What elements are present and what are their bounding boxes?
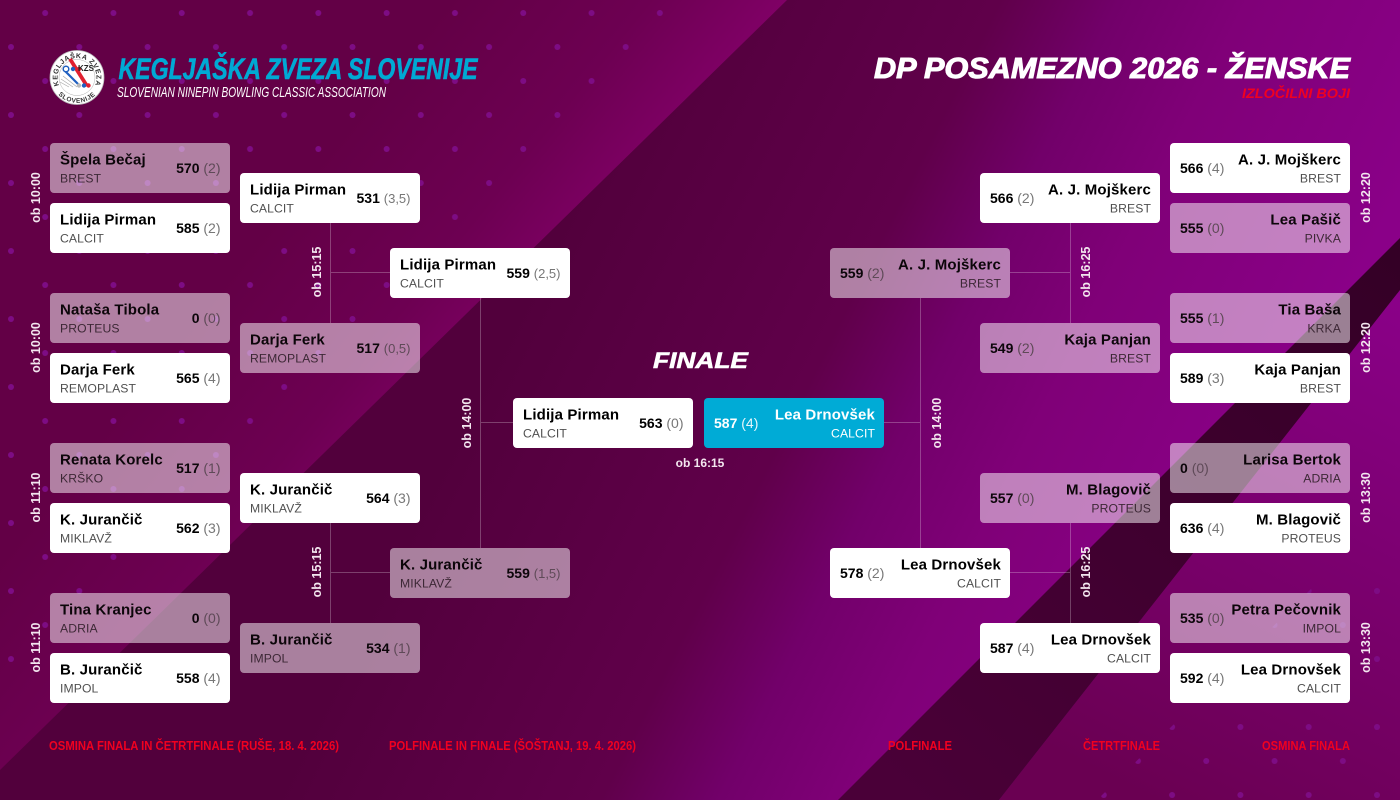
match card: B. Jurančič: B. Jurančič — [250, 632, 333, 648]
match card: Nataša Tibola: 0 (0) — [192, 310, 220, 326]
match card: Lea Drnovšek (winner): CALCIT — [831, 426, 875, 440]
match card: K. Jurančič: MIKLAVŽ — [60, 530, 112, 546]
match card: Lea Drnovšek: Lea Drnovšek — [1051, 632, 1151, 648]
match card: K. Jurančič: MIKLAVŽ — [400, 576, 452, 590]
match card: Petra Pečovnik: IMPOL — [1303, 622, 1341, 636]
match card: Tia Baša: Tia Baša — [1278, 302, 1341, 318]
round labels footer: POLFINALE IN FINALE (ŠOŠTANJ, 19. 4. 2026) — [389, 738, 636, 753]
title: DP POSAMEZNO 2026 - ŽENSKE — [874, 51, 1352, 85]
match card: B. Jurančič: IMPOL — [60, 682, 99, 696]
match card: Lea Drnovšek: 592 (4) — [1180, 670, 1224, 686]
match card: Lea Drnovšek: CALCIT — [1107, 652, 1151, 666]
match card: B. Jurančič: B. Jurančič — [60, 662, 143, 678]
match card: Kaja Panjan — [980, 323, 1160, 373]
match card: Nataša Tibola: Nataša Tibola — [60, 302, 160, 318]
match card: Darja Ferk — [50, 353, 230, 403]
match card: Darja Ferk — [240, 323, 420, 373]
match card: Tina Kranjec: Tina Kranjec — [60, 602, 152, 618]
match card: Lea Drnovšek: CALCIT — [957, 576, 1001, 590]
match card: Lea Pašič: Lea Pašič — [1270, 212, 1341, 228]
match card: K. Jurančič: 559 (1,5) — [507, 565, 560, 581]
match card: Lidija Pirman — [513, 398, 693, 448]
match card: Lidija Pirman: Lidija Pirman — [60, 212, 156, 228]
match card: A. J. Mojškerc: 566 (4) — [1180, 160, 1224, 176]
match card: A. J. Mojškerc: 566 (2) — [990, 190, 1034, 206]
match card: B. Jurančič: 558 (4) — [176, 670, 220, 686]
panel: left bracket round of 16 — [50, 143, 230, 703]
match card: M. Blagovič: 557 (0) — [990, 490, 1034, 506]
match card: Renata Korelc — [50, 443, 230, 493]
match start times: ob 14:00 — [930, 398, 944, 448]
match card: K. Jurančič: K. Jurančič — [60, 512, 143, 528]
match card: Darja Ferk: REMOPLAST — [250, 352, 327, 366]
match card: K. Jurančič — [390, 548, 570, 598]
match start times: ob 14:00 — [460, 398, 474, 448]
match start times: ob 15:15 — [310, 547, 324, 597]
match card: Darja Ferk: 517 (0,5) — [357, 340, 410, 356]
match card: Darja Ferk: Darja Ferk — [250, 332, 325, 348]
match card: Kaja Panjan: BREST — [1110, 352, 1151, 366]
match card: Kaja Panjan: Kaja Panjan — [1254, 362, 1341, 378]
icon: federation round logo: KZS — [78, 64, 95, 73]
connector lines — [330, 223, 1070, 623]
match card: Larisa Bertok — [1170, 443, 1350, 493]
match card: Darja Ferk: Darja Ferk — [60, 362, 135, 378]
match card: Kaja Panjan: Kaja Panjan — [1064, 332, 1151, 348]
final start time: ob 16:15 — [676, 456, 725, 470]
match card: Lidija Pirman: CALCIT — [60, 232, 104, 246]
panel: right bracket semifinals — [830, 248, 1010, 598]
match card: Špela Bečaj — [50, 143, 230, 193]
match card: Tina Kranjec — [50, 593, 230, 643]
match card: Lidija Pirman: Lidija Pirman — [250, 182, 346, 198]
match card: Lidija Pirman: CALCIT — [523, 426, 567, 440]
match start times: ob 13:30 — [1359, 622, 1373, 673]
match card: M. Blagovič — [1170, 503, 1350, 553]
match card: Petra Pečovnik — [1170, 593, 1350, 643]
match card: Špela Bečaj: BREST — [60, 172, 102, 186]
match card: B. Jurančič — [240, 623, 420, 673]
match card: A. J. Mojškerc — [830, 248, 1010, 298]
match card: Nataša Tibola — [50, 293, 230, 343]
match card: Lea Drnovšek — [1170, 653, 1350, 703]
match card: Tina Kranjec: ADRIA — [60, 622, 99, 636]
subtitle: knockout stage: IZLOČILNI BOJI — [1242, 84, 1351, 101]
match card: Nataša Tibola: PROTEUS — [60, 322, 120, 336]
match card: Darja Ferk: REMOPLAST — [60, 382, 137, 396]
match card: B. Jurančič: 534 (1) — [366, 640, 410, 656]
match card: A. J. Mojškerc: 559 (2) — [840, 265, 884, 281]
match card: Lidija Pirman — [50, 203, 230, 253]
match card: Lidija Pirman: 559 (2,5) — [507, 265, 560, 281]
match card: Kaja Panjan: BREST — [1300, 382, 1341, 396]
match card: Lea Pašič: PIVKA — [1305, 232, 1342, 246]
match card: Lea Drnovšek: Lea Drnovšek — [901, 556, 1001, 574]
icon: federation round logo — [50, 50, 104, 105]
match card: K. Jurančič — [50, 503, 230, 553]
match card: Larisa Bertok: ADRIA — [1303, 472, 1342, 486]
subtitle: federation name in English: SLOVENIAN NINEPIN BOWLING CLASSIC ASSOCIATION — [117, 85, 386, 101]
match card: B. Jurančič — [50, 653, 230, 703]
match card: Špela Bečaj: 570 (2) — [176, 160, 220, 176]
match card: Renata Korelc: 517 (1) — [176, 460, 220, 476]
heading: federation name: KEGLJAŠKA ZVEZA SLOVENIJE — [118, 52, 478, 86]
match card: Lidija Pirman — [390, 248, 570, 298]
match card: M. Blagovič: M. Blagovič — [1256, 512, 1341, 528]
match card: Lidija Pirman: 585 (2) — [176, 220, 220, 236]
panel: left bracket quarterfinals — [240, 173, 420, 673]
match card: Larisa Bertok: Larisa Bertok — [1243, 452, 1342, 468]
match card: A. J. Mojškerc: BREST — [1110, 202, 1151, 216]
icon: federation round logo: KEGLJAŠKA ZVEZA — [52, 52, 102, 86]
header: federation logo and name — [50, 50, 478, 105]
match card: Lidija Pirman — [240, 173, 420, 223]
match card: Tia Baša: KRKA — [1307, 322, 1342, 336]
match start times: ob 10:00 — [29, 172, 43, 223]
match card: Kaja Panjan: 549 (2) — [990, 340, 1034, 356]
match card: A. J. Mojškerc: BREST — [1300, 172, 1341, 186]
panel: final — [513, 348, 884, 470]
match card: A. J. Mojškerc: A. J. Mojškerc — [898, 256, 1001, 274]
match card: Lea Drnovšek: Lea Drnovšek — [1241, 662, 1341, 678]
match card: Tia Baša: 555 (1) — [1180, 310, 1224, 326]
match card: Renata Korelc: KRŠKO — [60, 470, 103, 486]
match card: Lidija Pirman: CALCIT — [400, 276, 444, 290]
match start times: ob 13:30 — [1359, 472, 1373, 523]
match card: Renata Korelc: Renata Korelc — [60, 452, 163, 468]
match card: Petra Pečovnik: Petra Pečovnik — [1231, 602, 1342, 618]
match card: M. Blagovič: PROTEUS — [1091, 502, 1151, 516]
match card: A. J. Mojškerc — [980, 173, 1160, 223]
match start times: ob 12:20 — [1359, 322, 1373, 373]
match card: Tina Kranjec: 0 (0) — [192, 610, 220, 626]
round labels footer — [49, 738, 1351, 753]
match card: Larisa Bertok: 0 (0) — [1180, 460, 1209, 476]
match card: Lea Drnovšek — [830, 548, 1010, 598]
match card: Špela Bečaj: Špela Bečaj — [60, 150, 146, 168]
match card: A. J. Mojškerc: BREST — [960, 276, 1001, 290]
match card: Lea Drnovšek: 587 (4) — [990, 640, 1034, 656]
match card: Lidija Pirman: Lidija Pirman — [523, 406, 619, 424]
match card: A. J. Mojškerc — [1170, 143, 1350, 193]
match start times: ob 15:15 — [310, 247, 324, 297]
match start times — [29, 172, 1373, 673]
match card: M. Blagovič: M. Blagovič — [1066, 482, 1151, 498]
match card: Lidija Pirman: 563 (0) — [639, 415, 684, 431]
match card: Lea Drnovšek: CALCIT — [1297, 682, 1341, 696]
panel: right bracket round of 16 — [1170, 143, 1350, 703]
round labels footer: OSMINA FINALA — [1262, 738, 1351, 753]
match card: M. Blagovič: PROTEUS — [1281, 532, 1341, 546]
match start times: ob 16:25 — [1079, 547, 1093, 597]
round labels footer: OSMINA FINALA IN ČETRTFINALE (RUŠE, 18. 4. 2026) — [49, 738, 339, 753]
match card: Lea Drnovšek — [980, 623, 1160, 673]
match start times: ob 11:10 — [29, 622, 43, 673]
match card: A. J. Mojškerc: A. J. Mojškerc — [1048, 182, 1151, 198]
match card: B. Jurančič: IMPOL — [250, 652, 289, 666]
match card: Lea Pašič — [1170, 203, 1350, 253]
match card: Lea Drnovšek (winner) — [704, 398, 884, 448]
match card: Lea Pašič: 555 (0) — [1180, 220, 1224, 236]
match start times: ob 11:10 — [29, 472, 43, 523]
header: competition title — [874, 51, 1352, 101]
match card: Lidija Pirman: CALCIT — [250, 202, 294, 216]
panel: right bracket quarterfinals — [980, 173, 1160, 673]
match start times: ob 12:20 — [1359, 172, 1373, 223]
round labels footer: POLFINALE — [888, 738, 952, 753]
match card: Lea Drnovšek (winner): 587 (4) — [714, 415, 758, 431]
match card: Petra Pečovnik: 535 (0) — [1180, 610, 1224, 626]
match card: Lea Drnovšek (winner): Lea Drnovšek — [775, 406, 875, 424]
match start times: ob 16:25 — [1079, 247, 1093, 297]
match card: K. Jurančič: K. Jurančič — [250, 482, 333, 498]
match card: K. Jurančič: 562 (3) — [176, 520, 220, 536]
match card: Darja Ferk: 565 (4) — [176, 370, 220, 386]
match card: Lidija Pirman: Lidija Pirman — [400, 256, 496, 274]
match card: A. J. Mojškerc: A. J. Mojškerc — [1238, 152, 1341, 168]
match card: K. Jurančič: K. Jurančič — [400, 556, 483, 574]
match card: Lidija Pirman: 531 (3,5) — [357, 190, 410, 206]
heading: final: FINALE — [653, 348, 750, 373]
panel: left bracket semifinals — [390, 248, 570, 598]
icon: federation round logo: SLOVENIJE — [58, 92, 96, 103]
match card: M. Blagovič: 636 (4) — [1180, 520, 1224, 536]
match card: K. Jurančič — [240, 473, 420, 523]
match card: K. Jurančič: MIKLAVŽ — [250, 500, 302, 516]
match card: M. Blagovič — [980, 473, 1160, 523]
match card: Tia Baša — [1170, 293, 1350, 343]
match start times: ob 10:00 — [29, 322, 43, 373]
match card: Lea Drnovšek: 578 (2) — [840, 565, 884, 581]
match card: Kaja Panjan: 589 (3) — [1180, 370, 1224, 386]
match card: K. Jurančič: 564 (3) — [366, 490, 410, 506]
match card: Kaja Panjan — [1170, 353, 1350, 403]
round labels footer: ČETRTFINALE — [1083, 738, 1160, 753]
